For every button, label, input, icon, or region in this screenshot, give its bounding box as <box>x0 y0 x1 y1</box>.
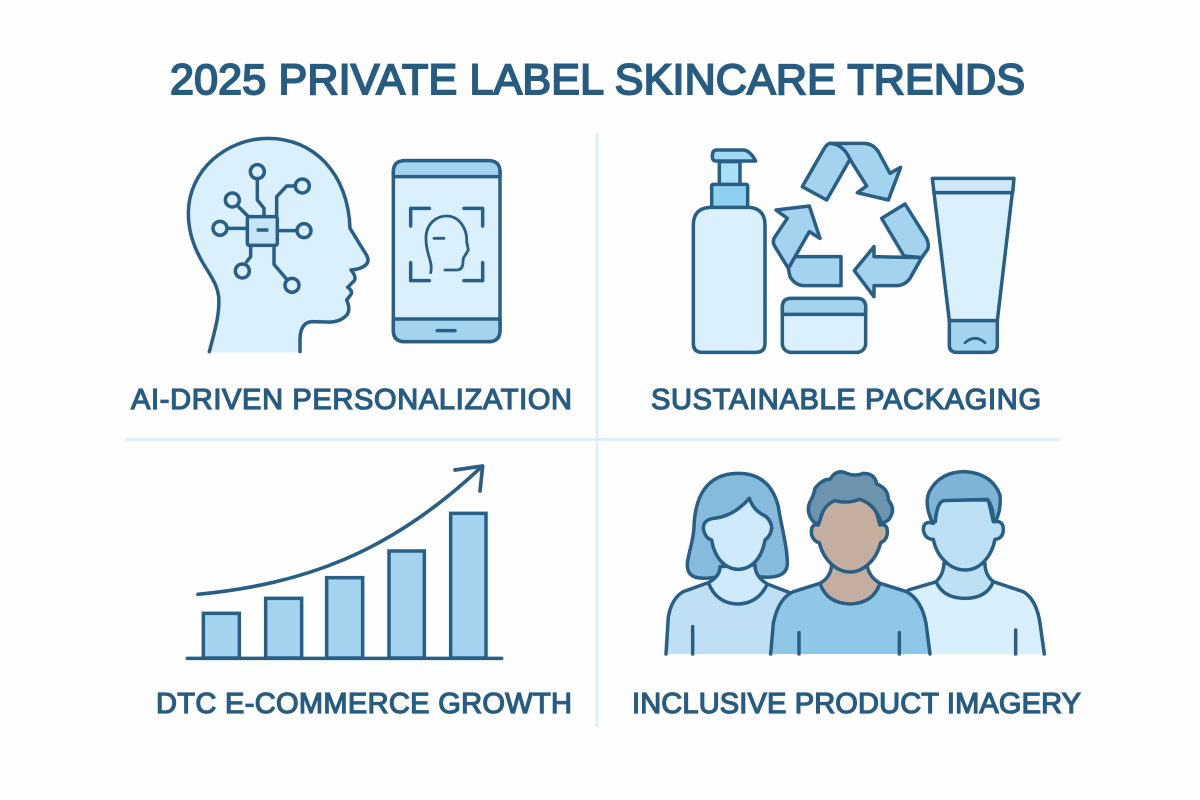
icon: three people <box>666 472 1044 654</box>
panel: AI-driven personalization <box>131 138 572 416</box>
label: SUSTAINABLE PACKAGING <box>651 384 1041 416</box>
panel: DTC e-commerce growth <box>156 466 572 720</box>
icon: jar <box>782 298 866 352</box>
label: INCLUSIVE PRODUCT IMAGERY <box>632 688 1081 720</box>
person: left <box>666 473 793 654</box>
title: 2025 PRIVATE LABEL SKINCARE TRENDS <box>170 56 1025 104</box>
panel: sustainable packaging <box>651 143 1041 416</box>
person: center <box>771 472 930 654</box>
icon: phone face scan <box>393 161 500 342</box>
label: DTC E-COMMERCE GROWTH <box>156 688 572 720</box>
bar chart with growth arrow <box>187 466 502 658</box>
icon: tube <box>932 178 1014 352</box>
icon: head with circuit <box>188 138 368 352</box>
icon: recycling arrows <box>773 143 928 297</box>
label: AI-DRIVEN PERSONALIZATION <box>131 384 572 416</box>
panel: inclusive product imagery <box>632 472 1081 720</box>
person: right <box>908 472 1044 654</box>
icon: pump bottle <box>693 150 765 352</box>
